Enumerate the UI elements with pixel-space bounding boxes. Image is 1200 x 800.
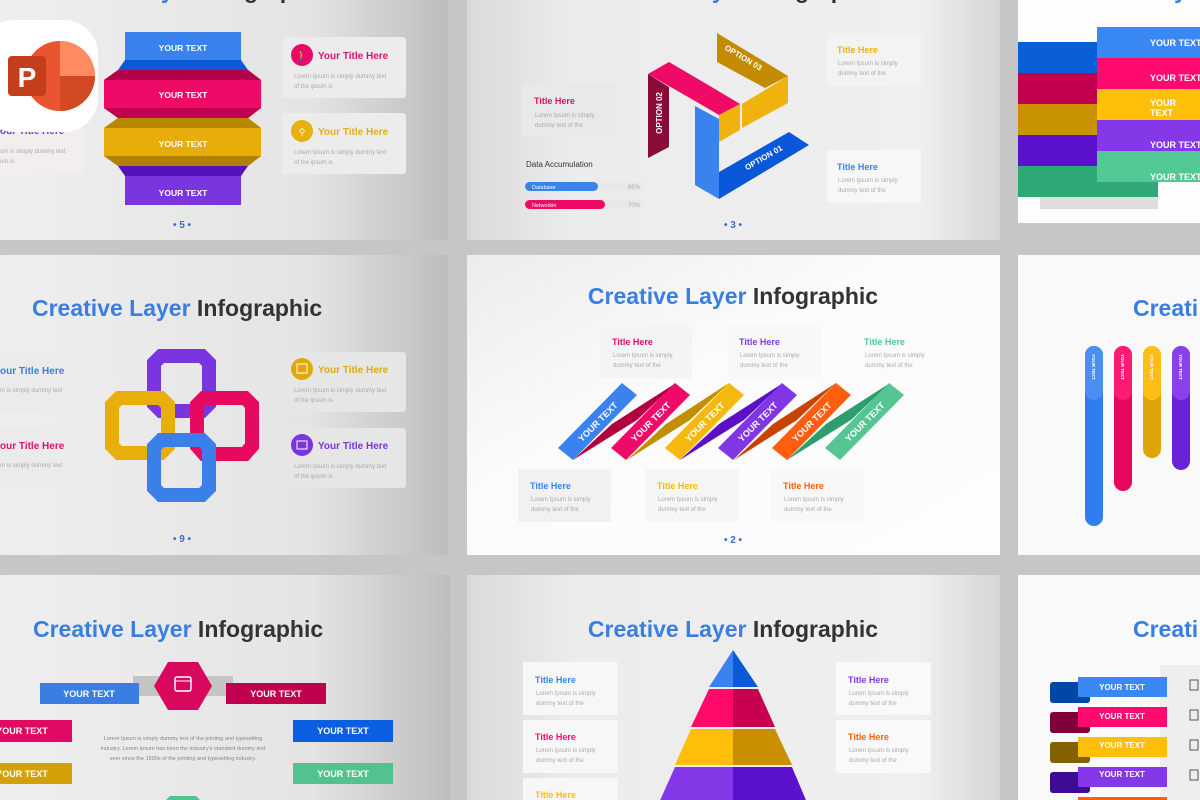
card: right bottom [827, 150, 921, 203]
card: left 1 [0, 352, 80, 412]
label: left pink [0, 720, 72, 742]
cards bottom row: dummy text of the [531, 507, 579, 513]
ribbon labels: YOUR TEXT [1099, 712, 1145, 721]
ribbon labels [1050, 677, 1167, 800]
card: left 1: our Title Here [0, 366, 65, 377]
card: left partial: our Title Here [0, 126, 65, 137]
vertical pills: YOUR TEXT [1149, 354, 1154, 380]
cards right: Title Here [848, 675, 889, 685]
card: right top [827, 33, 921, 86]
cards bottom row: Lorem Ipsum is simply [658, 497, 718, 503]
card: right 1 [282, 37, 406, 98]
cards left: Title Here [535, 790, 576, 800]
cards bottom row: Title Here [530, 481, 571, 491]
bar chart: data accumulation: Data Accumulation [526, 160, 593, 169]
isometric option diagram: OPTION 01 [743, 143, 785, 172]
cards left: Title Here [535, 732, 576, 742]
cards top row: dummy text of the [865, 363, 913, 369]
title: Creative Layer Infographic [32, 295, 322, 321]
layered strips back [1018, 42, 1158, 209]
layered strips front with labels: YOUR TEXT [1150, 38, 1200, 48]
title partial: Creati [1133, 616, 1198, 642]
card: left 1: m is simply dummy text [0, 388, 63, 394]
card: right 1: Your Title Here [318, 365, 389, 376]
title: Creative Layer Infographic [33, 616, 323, 642]
card: left title: dummy text of the [535, 123, 583, 129]
cards top row: Lorem Ipsum is simply [613, 353, 673, 359]
cards bottom row: dummy text of the [658, 507, 706, 513]
label: top-left blue [40, 683, 139, 704]
cards top row: dummy text of the [613, 363, 661, 369]
cards left: Lorem Ipsum is simply [536, 748, 596, 754]
cards top row: Title Here [864, 337, 905, 347]
layered strips front with labels: YOUR [1150, 98, 1177, 108]
folded ribbons: YOUR TEXT [736, 400, 780, 444]
card: left title [522, 84, 616, 137]
card: right 1: Lorem Ipsum is simply dummy text [294, 388, 387, 394]
layered strips front with labels [1097, 27, 1200, 182]
page number 3: • 3 • [724, 220, 743, 231]
label: top-right crimson: YOUR TEXT [250, 689, 302, 699]
card: right 2: of the ipsum is [294, 160, 333, 166]
card: right top: Title Here [837, 45, 878, 55]
vertical pills: YOUR TEXT [1178, 354, 1183, 380]
cards top row: Title Here [612, 337, 653, 347]
bar chart: data accumulation: Networkin [532, 203, 556, 209]
card: right 1: Lorem Ipsum is simply dummy text [294, 74, 387, 80]
card: left 2: m is simply dummy text [0, 463, 63, 469]
slide: middle-right [1018, 255, 1200, 555]
cards bottom row: Lorem Ipsum is simply [784, 497, 844, 503]
card: left partial: um is [0, 159, 14, 165]
card: left 2: our Title Here [0, 441, 65, 452]
card: right 1: Your Title Here [318, 51, 389, 62]
cards bottom row [518, 469, 865, 522]
label: top-left blue: YOUR TEXT [63, 689, 115, 699]
title: Creative Layer Infographic [588, 616, 878, 642]
card: right 1: of the ipsum is [294, 84, 333, 90]
title partial: Creati [1133, 295, 1198, 321]
card: left title: Title Here [534, 96, 575, 106]
slide: top-left (page 5) [0, 0, 448, 240]
cards top row: dummy text of the [740, 363, 788, 369]
page number 9: • 9 • [173, 534, 192, 545]
card: right 2 [282, 113, 406, 174]
card: right 2 [282, 428, 406, 488]
card: right bottom: dummy text of the [838, 188, 886, 194]
paragraph [101, 736, 266, 762]
folded ribbons: YOUR TEXT [790, 400, 834, 444]
cards bottom row: Title Here [783, 481, 824, 491]
vertical pills: YOUR TEXT [1091, 354, 1096, 380]
isometric option diagram [648, 33, 809, 199]
card: left partial: um is simply dummy text [0, 149, 66, 155]
cards right: Lorem Ipsum is simply [849, 691, 909, 697]
card: right bottom: Lorem Ipsum is simply [838, 178, 898, 184]
folded ribbons [558, 383, 904, 460]
label: right green: YOUR TEXT [317, 769, 369, 779]
icon: PowerPoint logo [0, 20, 98, 132]
card: right 2: Lorem Ipsum is simply dummy text [294, 464, 387, 470]
layered strips front with labels: TEXT [1150, 108, 1174, 118]
cards top row: Title Here [739, 337, 780, 347]
isometric option diagram: OPTION 02 [655, 92, 664, 134]
layered stack: 4 tiers: YOUR TEXT [159, 188, 208, 198]
cards right [836, 662, 931, 773]
cards right: Title Here [848, 732, 889, 742]
bar chart: data accumulation [525, 160, 643, 209]
cards right: dummy text of the [849, 701, 897, 707]
folded ribbons: YOUR TEXT [843, 400, 887, 444]
page number 5: • 5 • [173, 220, 192, 231]
bar chart: data accumulation: 70% [628, 203, 641, 209]
ribbon labels: YOUR TEXT [1099, 770, 1145, 779]
label: right blue: YOUR TEXT [317, 726, 369, 736]
cards left [523, 662, 618, 800]
card: right 2: ⚲ [299, 127, 305, 137]
card: right 2: Lorem Ipsum is simply dummy text [294, 150, 387, 156]
cards left: dummy text of the [536, 758, 584, 764]
slide: bottom-right [1018, 575, 1200, 800]
layered strips front with labels: YOUR TEXT [1150, 172, 1200, 182]
cards right: Lorem Ipsum is simply [849, 748, 909, 754]
card: right 1: 🚶 [296, 49, 308, 62]
ribbon labels: YOUR TEXT [1099, 683, 1145, 692]
card: left partial [0, 118, 84, 173]
card: left title: Lorem Ipsum is simply [535, 113, 595, 119]
layered stack: 4 tiers: YOUR TEXT [159, 90, 208, 100]
isometric option diagram: OPTION 03 [723, 43, 764, 73]
cards left: Title Here [535, 675, 576, 685]
page number 2: • 2 • [724, 535, 743, 546]
pyramid [658, 650, 808, 800]
cards bottom row: Lorem Ipsum is simply [531, 497, 591, 503]
slide: bottom-middle [467, 575, 1000, 800]
layered strips front with labels: YOUR TEXT [1150, 140, 1200, 150]
title: Creative Layer Infographic [588, 283, 878, 309]
cards top row: Lorem Ipsum is simply [740, 353, 800, 359]
paragraph: Lorem Ipsum is simply dummy text of the printing and typesetting [104, 736, 262, 742]
cards left: dummy text of the [536, 701, 584, 707]
ribbon labels: YOUR TEXT [1099, 741, 1145, 750]
chain rings [112, 356, 252, 495]
icon: PowerPoint logo: P [18, 62, 36, 93]
card: left 2 [0, 428, 80, 488]
cards top row [600, 325, 946, 378]
folded ribbons: YOUR TEXT [576, 400, 620, 444]
vertical pills [1085, 346, 1190, 526]
bar chart: data accumulation: 65% [628, 185, 641, 191]
paragraph: ever since the 1500s of the printing and typesetting industry. [110, 756, 257, 762]
layered strips front with labels: YOUR TEXT [1150, 73, 1200, 83]
slide: top-middle (page 3) [467, 0, 1000, 240]
cards bottom row: Title Here [657, 481, 698, 491]
cards right: dummy text of the [849, 758, 897, 764]
layered stack: 4 tiers: YOUR TEXT [159, 43, 208, 53]
card: right 1 [282, 352, 406, 412]
layered stack: 4 tiers [104, 32, 261, 205]
card: right 2: Your Title Here [318, 441, 389, 452]
vertical pills: YOUR TEXT [1120, 354, 1125, 380]
label: right green [293, 763, 393, 784]
cards left: Lorem Ipsum is simply [536, 691, 596, 697]
card: right 2: Your Title Here [318, 127, 389, 138]
card: right 2: of the ipsum is [294, 474, 333, 480]
bar chart: data accumulation: Database [532, 185, 556, 191]
folded ribbons: YOUR TEXT [683, 400, 727, 444]
folded ribbons: YOUR TEXT [629, 400, 673, 444]
label: left gold [0, 763, 72, 784]
slide: middle-left (page 9) [0, 255, 448, 555]
hexagon calendar hub [133, 662, 233, 710]
card: right top: dummy text of the [838, 71, 886, 77]
paragraph: industry. Lorem Ipsum has been the industry's standard dummy text [101, 746, 266, 752]
cards top row: Lorem Ipsum is simply [865, 353, 925, 359]
icons column [1190, 680, 1198, 780]
card: right top: Lorem Ipsum is simply [838, 61, 898, 67]
label: right blue [293, 720, 393, 742]
cards bottom row: dummy text of the [784, 507, 832, 513]
slide: center (page 2) [467, 255, 1000, 555]
slide: top-right [1018, 0, 1200, 223]
label: top-right crimson [226, 683, 326, 704]
slide: bottom-left [0, 575, 450, 800]
card: right 1: of the ipsum is [294, 398, 333, 404]
layered stack: 4 tiers: YOUR TEXT [159, 139, 208, 149]
card: right bottom: Title Here [837, 162, 878, 172]
